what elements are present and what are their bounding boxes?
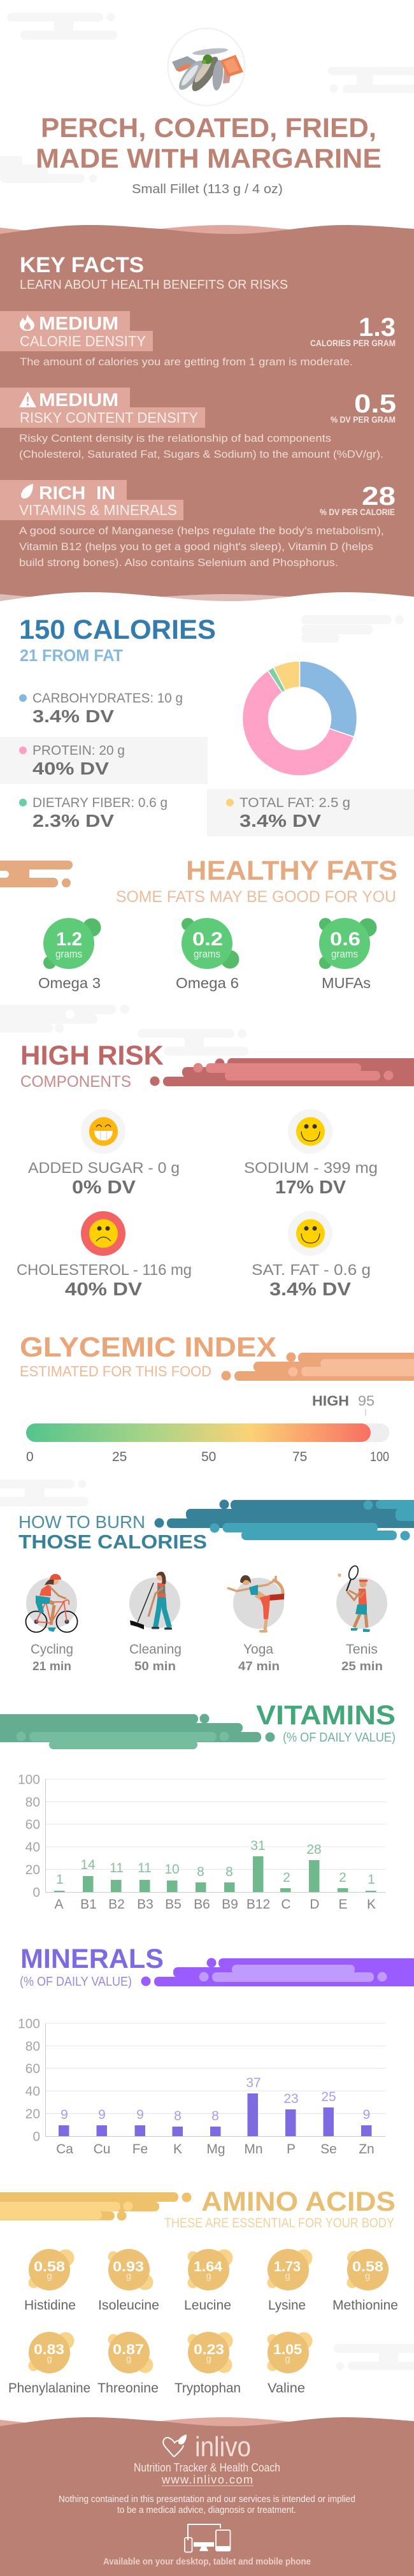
legend: protein (0, 737, 208, 784)
fact: calorie density: CALORIES PER GRAM (310, 338, 396, 348)
gauge scale: 25 (112, 1450, 127, 1464)
stat: mufas: MUFAs (322, 975, 371, 991)
fact: risky content density: RISKY CONTENT DENSITY (20, 409, 198, 426)
bar chart: vitamins: 11 (110, 1861, 124, 1875)
activity: cycling (25, 1574, 78, 1673)
gauge scale (26, 1450, 389, 1464)
calories heading: 150 CALORIES (19, 615, 216, 645)
item: sodium: 17% DV (275, 1177, 346, 1198)
minerals subheading: (% OF DAILY VALUE) (20, 1975, 132, 1989)
stat: mufas (319, 918, 377, 991)
bar chart: vitamins: B1 (80, 1897, 97, 1912)
gauge scale: 100 (370, 1450, 389, 1464)
logo: inlivo (163, 2431, 251, 2463)
amino: histidine: Histidine (24, 2298, 76, 2313)
burn heading: HOW TO BURN (18, 1512, 145, 1532)
cloud: calories (301, 615, 404, 643)
fact: rich in vitamins and minerals: RICH IN (39, 483, 115, 504)
burn heading: THOSE CALORIES (18, 1531, 207, 1553)
legend: dietary fiber: 2.3% DV (32, 811, 114, 831)
icon: leaf (21, 484, 33, 498)
bar chart: minerals: 9 (61, 2107, 68, 2122)
bar chart: minerals: Cu (94, 2142, 110, 2157)
cloud: burn (0, 1480, 89, 1506)
banner: high risk (150, 1058, 414, 1086)
stat: omega 3 (38, 918, 101, 991)
background clouds: header (0, 13, 414, 183)
icon: flame (20, 314, 34, 331)
amino: isoleucine (98, 2249, 159, 2313)
legend: carbohydrates: 3.4% DV (32, 706, 114, 726)
disclaimer: Nothing contained in this presentation and our services is intended or implied (59, 2494, 355, 2505)
amino: leucine: g (206, 2271, 211, 2281)
banner: burn (154, 1499, 414, 1540)
bar chart: vitamins: B12 (246, 1897, 270, 1912)
item: cholesterol (17, 1211, 192, 1300)
bar chart: minerals: 60 (25, 2062, 40, 2076)
amino: methionine: g (365, 2271, 370, 2281)
fact: risky content density: MEDIUM (39, 390, 118, 411)
amino: phenylalanine: Phenylalanine (8, 2381, 90, 2396)
amino: lysine: 1.73 (274, 2259, 301, 2274)
panel: healthy fats (0, 855, 397, 991)
bar chart: minerals: Se (320, 2142, 337, 2157)
amino: lysine: g (285, 2271, 290, 2281)
glycemic value: HIGH (312, 1393, 349, 1409)
fact: risky content density: % DV PER GRAM (331, 415, 396, 425)
activity: cleaning (129, 1572, 182, 1673)
panel: high risk components (0, 1005, 414, 1300)
banner: vitamins (0, 1714, 275, 1749)
title: MADE WITH MARGARINE (36, 143, 382, 174)
bar chart: vitamins: B3 (137, 1897, 153, 1912)
food image: circle with fish (168, 28, 245, 106)
icon: cyclist (25, 1574, 78, 1632)
amino: isoleucine: 0.93 (113, 2259, 144, 2274)
bar chart: vitamins: B6 (194, 1897, 210, 1912)
key facts heading: KEY FACTS (20, 253, 144, 277)
stat: omega 3: grams (55, 948, 82, 960)
bar chart: vitamins: 1 (368, 1872, 375, 1887)
fact: rich in vitamins and minerals: VITAMINS & MINERALS (19, 502, 177, 518)
panel: key facts (0, 225, 414, 607)
title (36, 113, 382, 174)
activity: cleaning: 50 min (134, 1660, 176, 1673)
amino: isoleucine: Isoleucine (98, 2298, 159, 2313)
bar chart: minerals: Mn (244, 2142, 263, 2157)
legend: protein: PROTEIN: 20 g (32, 743, 125, 758)
amino: leucine: Leucine (184, 2298, 231, 2313)
banner: glycemic (222, 1353, 414, 1381)
bar chart: vitamins: 11 (138, 1861, 152, 1875)
glycemic subheading: ESTIMATED FOR THIS FOOD (20, 1363, 211, 1379)
item: saturated fat (252, 1211, 371, 1300)
fact: rich in vitamins and minerals: Vitamin B12 (helps you to get a good night's sleep), Vitamin D (helps (19, 541, 373, 553)
amino: histidine: g (46, 2271, 52, 2281)
item: sodium: SODIUM - 399 mg (244, 1160, 378, 1177)
bar chart: minerals: 9 (363, 2107, 370, 2122)
stat: omega 6: 0.2 (192, 929, 223, 950)
bar chart: vitamins: 2 (339, 1870, 346, 1885)
bar chart: vitamins: 2 (283, 1870, 290, 1885)
icon: smiling face (296, 1117, 325, 1146)
legend: protein: 40% DV (32, 759, 109, 778)
amino: isoleucine: g (126, 2271, 131, 2281)
bar chart: minerals: Mg (206, 2142, 225, 2157)
icon: grinning face (89, 1117, 118, 1146)
activity: yoga (227, 1575, 284, 1673)
icon: tennis player (338, 1564, 370, 1632)
amino: tryptophan: Tryptophan (175, 2381, 241, 2396)
donut chart (243, 661, 357, 776)
bar chart: vitamins (18, 1772, 385, 1912)
bar chart: vitamins: 40 (25, 1840, 40, 1855)
amino: methionine (332, 2249, 398, 2313)
panel: minerals (18, 1944, 414, 2157)
bar chart: vitamins: B5 (165, 1897, 182, 1912)
minerals heading: MINERALS (20, 1944, 164, 1974)
bar chart: minerals: Zn (359, 2142, 375, 2157)
panel: vitamins (0, 1700, 396, 1912)
bar chart: minerals: K (173, 2142, 182, 2157)
activity: tennis: 25 min (341, 1660, 383, 1673)
bar chart: vitamins: B9 (222, 1897, 238, 1912)
gauge scale: 75 (292, 1450, 307, 1464)
fact: rich in vitamins and minerals: % DV PER CALORIE (320, 507, 395, 517)
item: added sugar: ADDED SUGAR - 0 g (28, 1160, 180, 1177)
fact: calorie density: 1.3 (359, 312, 396, 342)
bar chart: minerals: 8 (211, 2109, 219, 2123)
legend: carbohydrates (19, 691, 183, 726)
panel: calories (0, 615, 414, 836)
activity: cycling: Cycling (31, 1642, 73, 1657)
amino: tryptophan (175, 2332, 241, 2396)
item: cholesterol: 40% DV (65, 1279, 143, 1300)
item: added sugar: 0% DV (72, 1177, 136, 1198)
banner: amino acids (0, 2192, 191, 2221)
bar chart: minerals: Ca (56, 2142, 73, 2157)
amino: valine: g (285, 2354, 290, 2364)
high risk heading: HIGH RISK (20, 1040, 164, 1071)
stat: omega 3: 1.2 (56, 929, 82, 950)
amino: methionine: 0.58 (352, 2259, 383, 2274)
banner: healthy fats (0, 861, 73, 887)
calories from fat: 21 FROM FAT (20, 646, 123, 665)
bar chart: minerals: 9 (98, 2107, 106, 2122)
key facts subheading: LEARN ABOUT HEALTH BENEFITS OR RISKS (20, 278, 288, 292)
fact: risky content density: 0.5 (354, 389, 396, 418)
bar chart: minerals: 20 (25, 2107, 40, 2121)
disclaimer (59, 2494, 355, 2515)
amino: histidine (24, 2249, 76, 2313)
fact: calorie density: The amount of calories you are getting from 1 gram is moderate. (20, 356, 353, 368)
amino: valine: 1.05 (273, 2341, 302, 2357)
bar chart: minerals: 23 (283, 2092, 299, 2106)
fact: risky content density: Risky Content density is the relationship of bad components (19, 432, 331, 444)
stat: omega 6: grams (194, 948, 220, 960)
glycemic value (312, 1393, 375, 1416)
amino: threonine: 0.87 (113, 2341, 144, 2357)
amino: phenylalanine: 0.83 (34, 2341, 64, 2357)
high risk subheading: COMPONENTS (20, 1073, 131, 1091)
bar chart: vitamins: 31 (250, 1838, 266, 1853)
amino: leucine: 1.64 (194, 2259, 223, 2274)
tagline: Nutrition Tracker & Health Coach (134, 2461, 280, 2474)
activity: tennis (336, 1564, 387, 1673)
serving size: Small Fillet (113 g / 4 oz) (132, 182, 283, 196)
bar chart: minerals (18, 2017, 385, 2157)
stat: mufas: grams (331, 948, 358, 960)
activity: yoga: Yoga (243, 1642, 273, 1657)
panel: footer (0, 2417, 414, 2576)
bar chart: vitamins: 80 (25, 1795, 40, 1810)
icon: smiling face (296, 1219, 325, 1248)
fact: risky content density: (Cholesterol, Saturated Fat, Sugars & Sodium) to the amount (%DV/gr). (19, 448, 383, 460)
bar chart: vitamins: 10 (164, 1862, 180, 1877)
bar chart: minerals: 80 (25, 2039, 40, 2054)
bar chart: vitamins: 8 (225, 1865, 233, 1879)
legend: total fat (207, 789, 414, 836)
bar chart: minerals: 37 (246, 2076, 261, 2090)
item: cholesterol: CHOLESTEROL - 116 mg (17, 1262, 192, 1279)
bar chart: minerals: Fe (132, 2142, 148, 2157)
glycemic heading: GLYCEMIC INDEX (20, 1332, 276, 1363)
website: www.inlivo.com (161, 2473, 253, 2486)
fact: calorie density: CALORIE DENSITY (20, 333, 146, 349)
amino: phenylalanine: g (46, 2354, 52, 2364)
amino: leucine (184, 2249, 233, 2313)
bar chart: minerals: 25 (321, 2090, 336, 2104)
bar chart: vitamins: D (310, 1897, 320, 1912)
bar chart: vitamins: 28 (306, 1842, 322, 1857)
legend: carbohydrates: CARBOHYDRATES: 10 g (32, 691, 183, 706)
icon: person sweeping (130, 1572, 172, 1629)
amino: lysine (268, 2249, 312, 2313)
vitamins subheading: (% OF DAILY VALUE) (283, 1731, 396, 1745)
stat: omega 6: Omega 6 (176, 975, 239, 991)
panel: how to burn (0, 1480, 414, 1673)
bar chart: vitamins: K (367, 1897, 376, 1912)
bar chart: vitamins: 0 (32, 1886, 40, 1900)
icon: sad face (89, 1219, 118, 1248)
legend: dietary fiber (19, 796, 168, 831)
bar chart: vitamins: 8 (197, 1865, 204, 1879)
vitamins heading: VITAMINS (256, 1700, 396, 1731)
panel: glycemic index (20, 1332, 414, 1464)
activity: cycling: 21 min (32, 1660, 71, 1673)
fact: calorie density (0, 311, 396, 368)
stat: omega 3: Omega 3 (38, 975, 101, 991)
healthy fats subheading: SOME FATS MAY BE GOOD FOR YOU (116, 888, 396, 906)
bar chart: minerals: 9 (136, 2107, 144, 2122)
amino: valine (268, 2332, 312, 2396)
logo: inlivo: inlivo (195, 2431, 251, 2463)
legend: total fat: TOTAL FAT: 2.5 g (239, 796, 350, 810)
clouds: high risk (0, 1005, 248, 1056)
disclaimer: to be a medical advice, diagnosis or treatment. (117, 2505, 296, 2515)
panel: amino acids (0, 2187, 414, 2396)
bar chart: vitamins: C (281, 1897, 291, 1912)
fact: rich in vitamins and minerals: A good source of Manganese (helps regulate the body's metabolism), (19, 525, 384, 537)
fact: calorie density: MEDIUM (39, 314, 118, 334)
amino: valine: Valine (268, 2381, 305, 2396)
item: saturated fat: SAT. FAT - 0.6 g (252, 1262, 371, 1279)
title: PERCH, COATED, FRIED, (41, 113, 376, 143)
amino: threonine: Threonine (97, 2381, 159, 2396)
legend: dietary fiber: DIETARY FIBER: 0.6 g (32, 796, 168, 810)
icon: warning (19, 391, 36, 407)
activity: yoga: 47 min (238, 1660, 280, 1673)
gauge scale: 0 (26, 1450, 34, 1464)
amino: methionine: Methionine (332, 2298, 398, 2313)
glycemic value: 95 (358, 1393, 375, 1409)
amino: histidine: 0.58 (34, 2259, 65, 2274)
amino: threonine: g (126, 2354, 131, 2364)
bar chart: minerals: 40 (25, 2085, 40, 2099)
item: sodium (244, 1109, 378, 1198)
icon: yoga pose (227, 1575, 284, 1633)
fact: rich in vitamins and minerals (0, 480, 396, 569)
activity: cleaning: Cleaning (129, 1642, 182, 1657)
bar chart: minerals: P (287, 2142, 296, 2157)
stat: omega 6 (176, 918, 239, 991)
stat: mufas: 0.6 (330, 929, 360, 950)
amino: threonine (97, 2332, 159, 2396)
gauge scale: 50 (201, 1450, 216, 1464)
bar chart: vitamins: B2 (108, 1897, 125, 1912)
fact: rich in vitamins and minerals: 28 (362, 481, 396, 511)
bar chart: vitamins: 1 (56, 1872, 64, 1887)
availability note: Available on your desktop, tablet and mobile phone (103, 2556, 311, 2567)
bar chart: minerals: 8 (174, 2109, 182, 2123)
amino: tryptophan: g (206, 2354, 211, 2364)
glycemic gauge (26, 1423, 390, 1442)
icon: devices (185, 2524, 231, 2552)
item: saturated fat: 3.4% DV (269, 1279, 352, 1300)
amino acids heading: AMINO ACIDS (201, 2187, 396, 2217)
bar chart: vitamins: 60 (25, 1817, 40, 1832)
bar chart: vitamins: 14 (80, 1858, 96, 1872)
banner: minerals (141, 1958, 414, 1986)
amino: lysine: Lysine (268, 2298, 306, 2313)
burn heading (18, 1512, 207, 1553)
activity: tennis: Tenis (346, 1642, 378, 1657)
cloud: amino acids (334, 2344, 414, 2370)
bar chart: vitamins: 100 (18, 1772, 40, 1787)
fact: rich in vitamins and minerals: build strong bones). Also contains Selenium and Phosphorus. (19, 557, 338, 569)
amino: tryptophan: 0.23 (194, 2341, 224, 2357)
amino: phenylalanine (8, 2332, 90, 2396)
bar chart: vitamins: A (54, 1897, 64, 1912)
bar chart: vitamins: E (338, 1897, 348, 1912)
bar chart: vitamins: 20 (25, 1863, 40, 1877)
legend: total fat: 3.4% DV (239, 811, 321, 831)
item: added sugar (28, 1109, 180, 1198)
bar chart: minerals: 100 (18, 2017, 40, 2031)
healthy fats heading: HEALTHY FATS (186, 855, 397, 886)
bar chart: minerals: 0 (32, 2129, 40, 2144)
fact: risky content density (0, 388, 396, 460)
